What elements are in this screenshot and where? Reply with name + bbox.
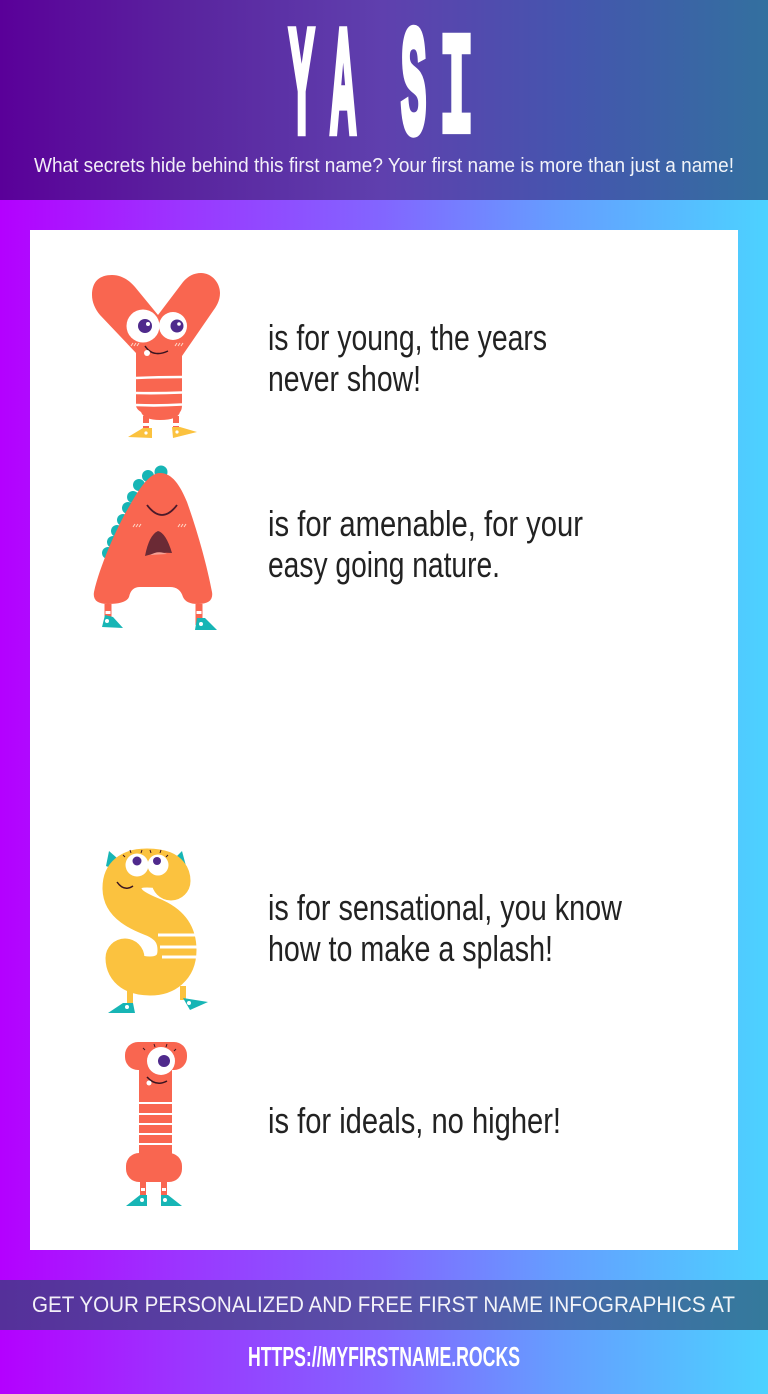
icon: monster letter Y [92,273,220,438]
subtitle: What secrets hide behind this first name? Your first name is more than just a name! [34,155,734,177]
footer url: HTTPS://MYFIRSTNAME.ROCKS [248,1341,520,1372]
title [289,0,474,176]
text: Y line: never show! [268,358,421,399]
header band [0,0,768,200]
icon: monster letter A [94,466,217,630]
title: S [401,0,426,163]
text: A line [268,503,583,585]
text: Y line: is for young, the years [268,317,547,358]
text: Y line [268,317,547,399]
footer call-to-action band: GET YOUR PERSONALIZED AND FREE FIRST NAME INFOGRAPHICS AT [32,1292,735,1317]
text: S line [268,887,623,969]
text: I line: is for ideals, no higher! [268,1100,561,1141]
icon: monster letter S [106,850,208,1013]
text: A line: is for amenable, for your [268,503,583,544]
text: A line: easy going nature. [268,544,500,585]
text: S line: is for sensational, you know [268,887,623,928]
title: I [439,11,474,176]
title: A [330,0,356,163]
icon: monster letter I [125,1042,187,1206]
title: Y [289,0,314,163]
white content panel [30,230,738,1250]
footer call-to-action band [0,1280,768,1330]
text: S line: how to make a splash! [268,928,553,969]
